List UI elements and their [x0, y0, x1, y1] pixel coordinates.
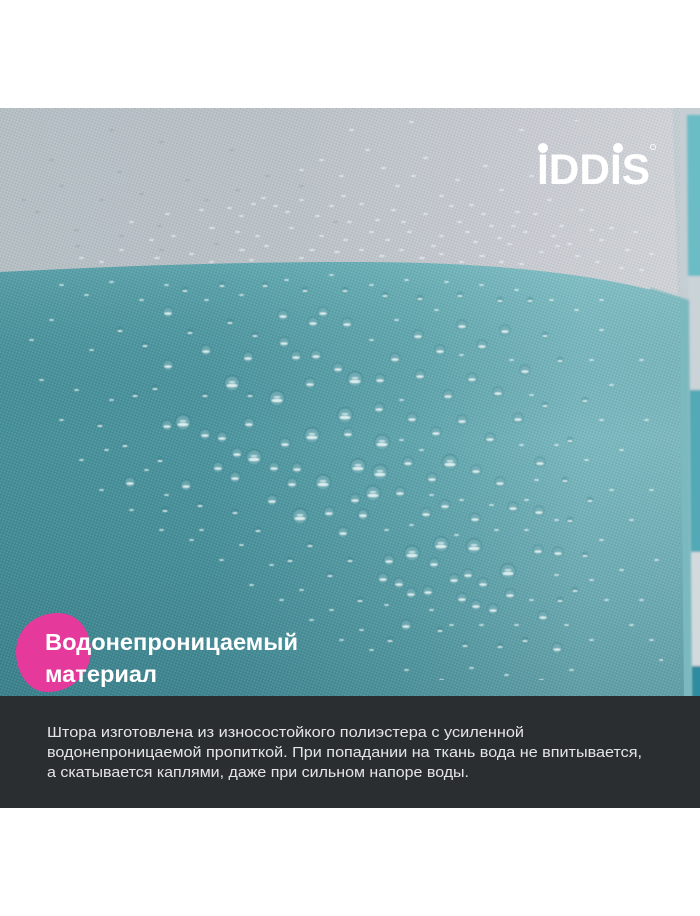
pink accent blob	[16, 613, 91, 692]
water drops	[22, 120, 663, 680]
description text	[47, 725, 642, 781]
heading: Водонепроницаемый	[45, 629, 298, 655]
infographic canvas	[0, 108, 700, 808]
teal right soft edge	[650, 288, 692, 700]
fine droplets on teal band	[30, 275, 663, 680]
right edge curtain stripes	[687, 115, 700, 700]
water drops on gray band	[80, 120, 653, 270]
teal fabric band	[0, 262, 684, 700]
fabric weave texture	[0, 108, 680, 696]
photo: curtain fabric with water drops	[0, 90, 700, 700]
heading: материал	[45, 661, 157, 687]
large drops	[404, 545, 420, 561]
gray fabric band	[0, 108, 678, 296]
description text: а скатывается каплями, даже при сильном напоре воды.	[47, 765, 469, 781]
description text: водонепроницаемой пропиткой. При попадании на ткань вода не впитывается,	[47, 745, 642, 761]
dark description panel	[0, 696, 700, 808]
heading	[45, 629, 298, 687]
description text: Штора изготовлена из износостойкого полиэстера с усиленной	[47, 725, 524, 741]
logo: IDDIS: IDDIS	[537, 146, 650, 194]
